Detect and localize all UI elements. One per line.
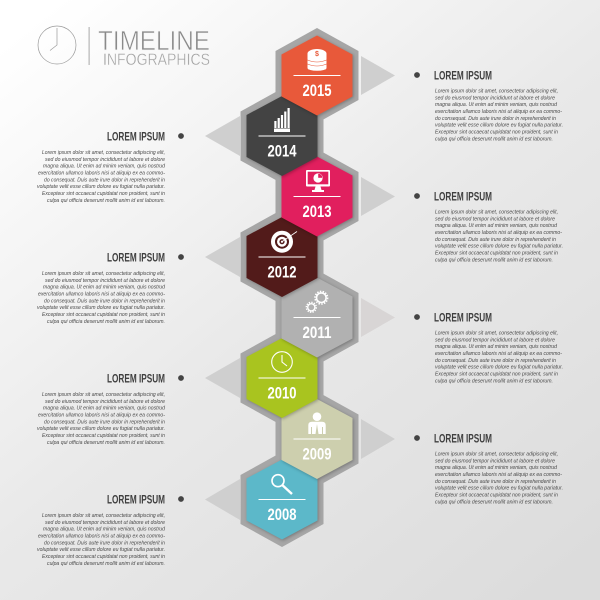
text block: left 4: voluptate velit esse cillum dolore eu fugiat nulla pariatur. (37, 547, 165, 553)
text block: left 1: Lorem ipsum dolor sit amet, consectetur adipiscing elit, (42, 150, 165, 156)
text block: right 4: voluptate velit esse cillum dolore eu fugiat nulla pariatur. (435, 486, 563, 492)
text block: right 4: sed do eiusmod tempor incididunt ut labore et dolore (435, 458, 555, 464)
text block: right 3: sed do eiusmod tempor incididunt ut labore et dolore (435, 337, 555, 343)
text block: left 1: LOREM IPSUM (107, 130, 165, 144)
text block: left 1: do consequat. Duis aute irure dolor in reprehenderit in (44, 177, 165, 183)
text block: left 3: voluptate velit esse cillum dolore eu fugiat nulla pariatur. (37, 426, 165, 432)
hexagon 2010 (246, 338, 318, 418)
hexagon 2009 (282, 399, 352, 479)
hexagon 2015 (282, 36, 352, 116)
year 2010: 2010 (268, 384, 296, 402)
text block: right 4: Lorem ipsum dolor sit amet, consectetur adipiscing elit, (435, 452, 558, 458)
text block: left 2: sed do eiusmod tempor incididunt ut labore et dolore (45, 278, 165, 284)
text block: left 2: Lorem ipsum dolor sit amet, consectetur adipiscing elit, (42, 271, 165, 277)
header: clock and title (38, 25, 210, 69)
year 2013: 2013 (302, 202, 332, 221)
text block: right 2: exercitation ullamco laboris nisi ut aliquip ex ea commo- (435, 230, 562, 236)
text block: right 1: voluptate velit esse cillum dolore eu fugiat nulla pariatur. (435, 123, 563, 129)
text block: right 1: Lorem ipsum dolor sit amet, consectetur adipiscing elit, (435, 88, 558, 94)
text block: left 1: exercitation ullamco laboris nisi ut aliquip ex ea commo- (38, 170, 165, 176)
hexagon 2008 (246, 460, 318, 540)
text block: right 4: Excepteur sint occaecat cupidatat non proident, sunt in (435, 493, 558, 499)
hexagon 2013 (282, 156, 352, 236)
text block: left 2: culpa qui officia deserunt mollit anim id est laborum. (47, 319, 165, 325)
text block: right 1: LOREM IPSUM (434, 68, 492, 82)
text block: left 3 (37, 372, 184, 446)
text block: left 4: do consequat. Duis aute irure dolor in reprehenderit in (44, 540, 165, 546)
text block: left 4: Excepteur sint occaecat cupidatat non proident, sunt in (42, 554, 165, 560)
text block: right 4: culpa qui officia deserunt mollit anim id est laborum. (435, 499, 553, 505)
text block: right 1: Excepteur sint occaecat cupidatat non proident, sunt in (435, 130, 558, 136)
text block: left 3: LOREM IPSUM (107, 372, 165, 386)
text block: left 1: magna aliqua. Ut enim ad minim veniam, quis nostrud (43, 164, 166, 170)
text block: left 2: magna aliqua. Ut enim ad minim veniam, quis nostrud (43, 285, 166, 291)
year 2014: 2014 (268, 142, 297, 160)
hexagon 2011 (282, 278, 352, 358)
icon: coins: $ (315, 51, 319, 58)
icon: bar chart (274, 108, 290, 132)
text block: right 3 (414, 310, 563, 384)
text block: left 2 (37, 250, 184, 325)
text block: left 3: Lorem ipsum dolor sit amet, consectetur adipiscing elit, (42, 392, 165, 398)
text block: left 1: culpa qui officia deserunt mollit anim id est laborum. (47, 198, 165, 204)
icon: clock outline (38, 26, 76, 64)
text block: right 3: culpa qui officia deserunt mollit anim id est laborum. (435, 378, 553, 384)
title: timeline: TIMELINE (98, 25, 210, 56)
text block: left 3: exercitation ullamco laboris nisi ut aliquip ex ea commo- (38, 412, 165, 418)
text block: left 4: culpa qui officia deserunt mollit anim id est laborum. (47, 561, 165, 567)
text block: left 1: sed do eiusmod tempor incididunt ut labore et dolore (45, 157, 165, 163)
text block: left 4: sed do eiusmod tempor incididunt ut labore et dolore (45, 520, 165, 526)
text block: right 4 (414, 432, 563, 505)
year 2012: 2012 (268, 262, 296, 282)
text block: left 1 (37, 130, 184, 204)
hexagon 2012 (246, 217, 318, 297)
text block: right 2: sed do eiusmod tempor incididunt ut labore et dolore (435, 216, 555, 222)
text block: right 2: magna aliqua. Ut enim ad minim veniam, quis nostrud (435, 223, 558, 229)
text block: right 1: sed do eiusmod tempor incididunt ut labore et dolore (435, 95, 555, 101)
text block: left 3: sed do eiusmod tempor incididunt ut labore et dolore (45, 399, 165, 405)
year 2015: 2015 (302, 81, 332, 100)
text block: right 2: culpa qui officia deserunt mollit anim id est laborum. (435, 257, 553, 263)
text block: left 4: Lorem ipsum dolor sit amet, consectetur adipiscing elit, (42, 513, 165, 519)
text block: right 1: magna aliqua. Ut enim ad minim veniam, quis nostrud (435, 102, 558, 108)
icon: clock (272, 352, 292, 372)
text block: right 1: culpa qui officia deserunt mollit anim id est laborum. (435, 136, 553, 142)
year 2008: 2008 (268, 505, 296, 524)
text block: right 2: Excepteur sint occaecat cupidatat non proident, sunt in (435, 251, 558, 257)
text block: left 4 (37, 492, 184, 567)
icon: target (271, 231, 297, 253)
text block: left 3: magna aliqua. Ut enim ad minim veniam, quis nostrud (43, 406, 166, 412)
text block: right 4: exercitation ullamco laboris nisi ut aliquip ex ea commo- (435, 472, 562, 478)
text block: left 2: voluptate velit esse cillum dolore eu fugiat nulla pariatur. (37, 305, 165, 311)
text block: right 2: do consequat. Duis aute irure dolor in reprehenderit in (435, 237, 556, 243)
icon: monitor (306, 170, 330, 192)
text block: right 3: Excepteur sint occaecat cupidatat non proident, sunt in (435, 372, 558, 378)
text block: right 1: do consequat. Duis aute irure dolor in reprehenderit in (435, 116, 556, 122)
text block: left 4: LOREM IPSUM (107, 492, 165, 506)
text block: right 3: Lorem ipsum dolor sit amet, consectetur adipiscing elit, (435, 330, 558, 336)
text block: right 4: do consequat. Duis aute irure dolor in reprehenderit in (435, 479, 556, 485)
text block: right 3: exercitation ullamco laboris nisi ut aliquip ex ea commo- (435, 351, 562, 357)
text block: right 4: magna aliqua. Ut enim ad minim veniam, quis nostrud (435, 465, 558, 471)
text block: right 3: do consequat. Duis aute irure dolor in reprehenderit in (435, 358, 556, 364)
grey hexagon backing (240, 28, 358, 547)
text block: left 1: voluptate velit esse cillum dolore eu fugiat nulla pariatur. (37, 184, 165, 190)
text block: right 2 (414, 190, 563, 263)
text block: left 2: exercitation ullamco laboris nisi ut aliquip ex ea commo- (38, 292, 165, 298)
text block: right 2: Lorem ipsum dolor sit amet, consectetur adipiscing elit, (435, 210, 558, 216)
text block: right 2: LOREM IPSUM (434, 190, 492, 204)
text block: left 2: do consequat. Duis aute irure dolor in reprehenderit in (44, 298, 165, 304)
text block: left 2: LOREM IPSUM (107, 250, 165, 264)
text block: right 2: voluptate velit esse cillum dolore eu fugiat nulla pariatur. (435, 244, 563, 250)
icon: magnifier (272, 475, 292, 494)
subtitle: infographics: INFOGRAPHICS (103, 50, 210, 69)
year 2009: 2009 (302, 444, 332, 464)
text block: left 3: Excepteur sint occaecat cupidatat non proident, sunt in (42, 433, 165, 439)
text block: left 4: exercitation ullamco laboris nisi ut aliquip ex ea commo- (38, 534, 165, 540)
text block: right 3: voluptate velit esse cillum dolore eu fugiat nulla pariatur. (435, 365, 563, 371)
text block: left 3: culpa qui officia deserunt mollit anim id est laborum. (47, 440, 165, 446)
year 2011: 2011 (302, 323, 332, 342)
icon: person (308, 412, 326, 434)
text block: right 3: LOREM IPSUM (434, 310, 492, 324)
text block: left 4: magna aliqua. Ut enim ad minim veniam, quis nostrud (43, 527, 166, 533)
text block: right 3: magna aliqua. Ut enim ad minim veniam, quis nostrud (435, 344, 558, 350)
text block: left 1: Excepteur sint occaecat cupidatat non proident, sunt in (42, 191, 165, 197)
text block: left 2: Excepteur sint occaecat cupidatat non proident, sunt in (42, 312, 165, 318)
pointer triangles (205, 56, 395, 520)
text block: right 1: exercitation ullamco laboris nisi ut aliquip ex ea commo- (435, 109, 562, 115)
text block: left 3: do consequat. Duis aute irure dolor in reprehenderit in (44, 419, 165, 425)
icon: gears (306, 291, 328, 312)
text block: right 1 (414, 68, 563, 142)
text block: right 4: LOREM IPSUM (434, 432, 492, 446)
hexagon 2014 (246, 96, 318, 176)
